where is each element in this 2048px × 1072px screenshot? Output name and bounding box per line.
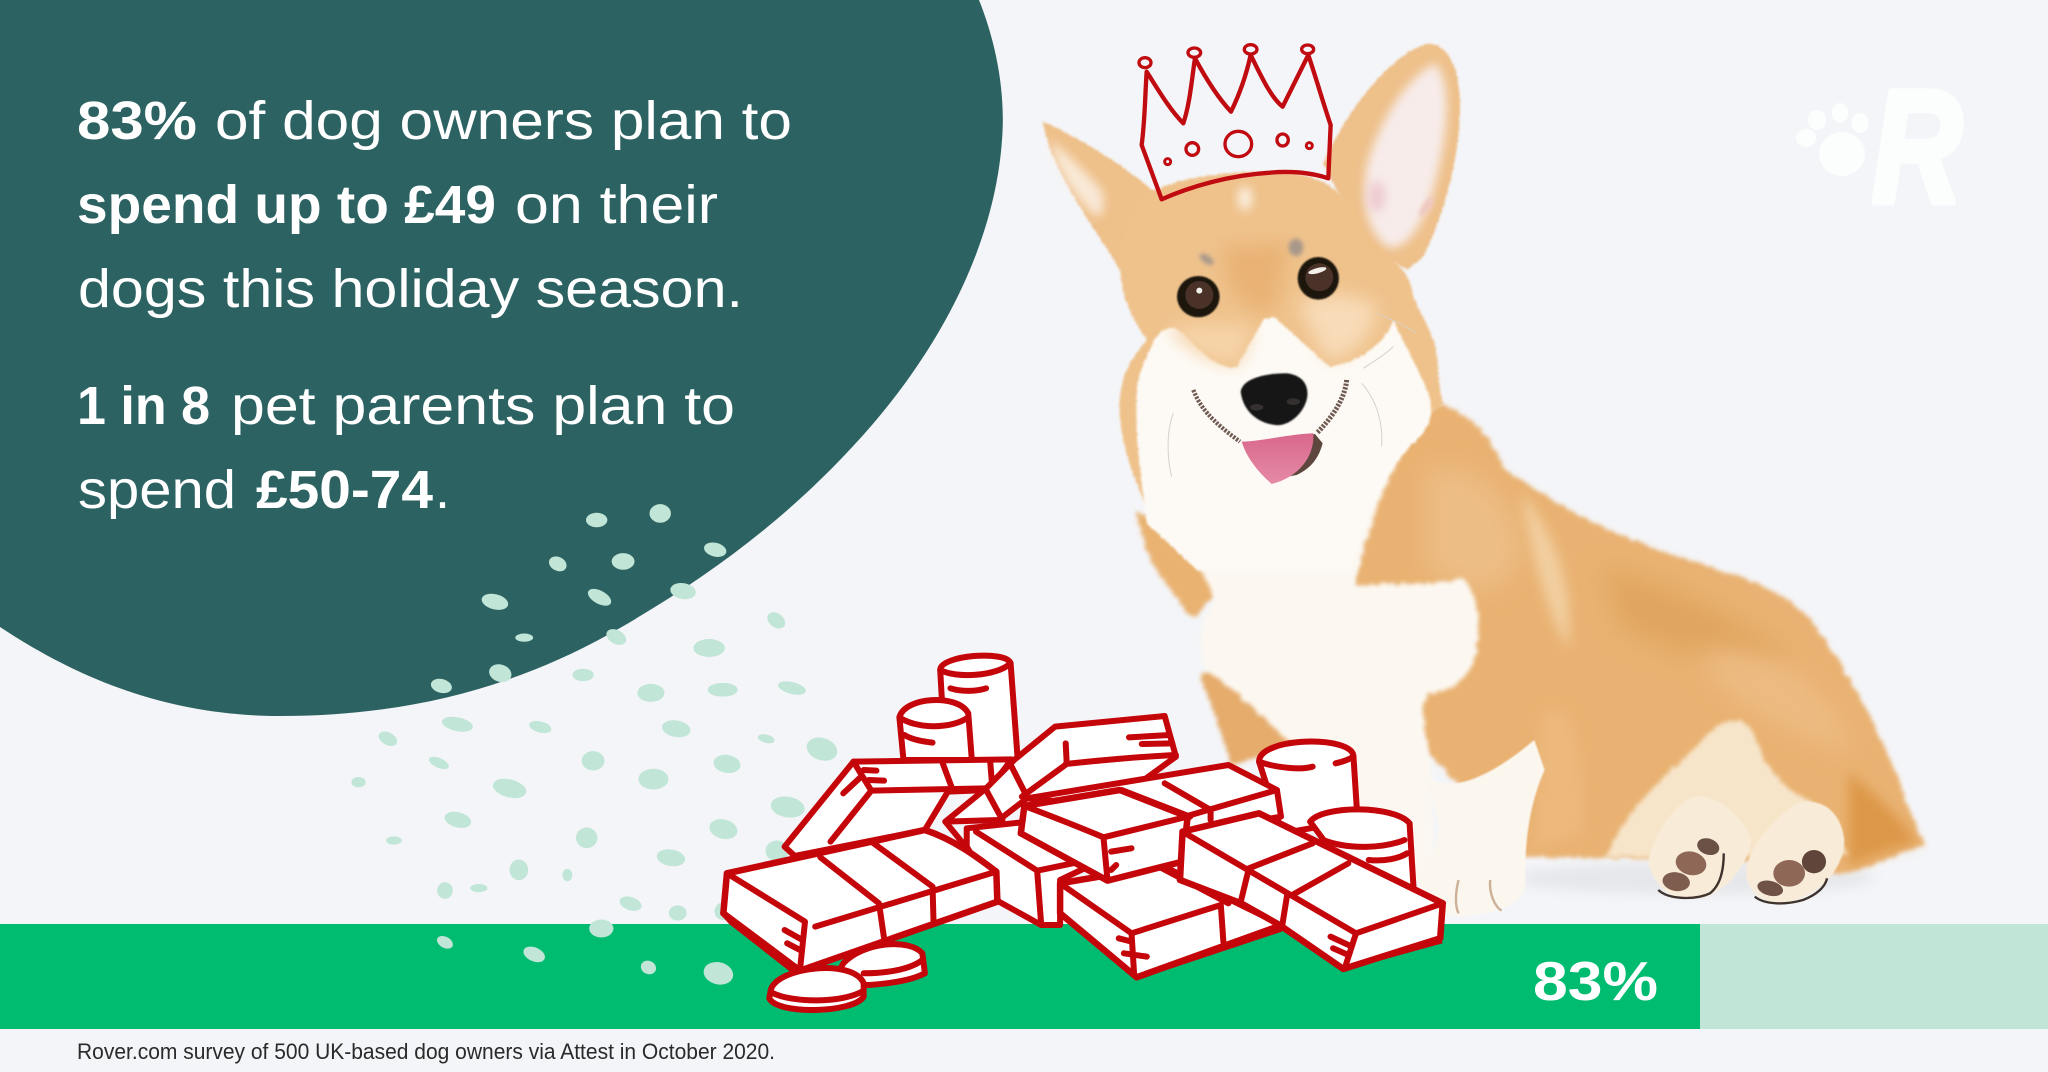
left hind paw (1648, 796, 1751, 899)
gift: low middle box (967, 823, 1088, 925)
right ear (1323, 43, 1460, 270)
dog hind paws and front leg (1417, 740, 1844, 917)
source footnote: Rover.com survey of 500 UK-based dog owners via Attest in October 2020. (77, 1039, 775, 1064)
icon: hand-drawn crown (1139, 45, 1331, 199)
right hind paw (1746, 802, 1844, 903)
stat: 1 in 8 pet parents (77, 376, 735, 520)
stat: 83% of dog owners: of dog owners plan to (215, 91, 792, 151)
whiskers (1168, 313, 1417, 477)
front leg (1417, 740, 1545, 917)
white chest (1144, 444, 1478, 882)
tongue (1242, 433, 1313, 484)
right eye (1298, 257, 1339, 300)
gift: centre box (1021, 790, 1188, 881)
nose (1241, 373, 1307, 425)
gift: large left box (723, 830, 997, 972)
stat: 83% of dog owners: spend up to £49 (77, 175, 496, 235)
panel: dark teal blob (0, 0, 1003, 716)
gift shadow edges (1137, 925, 1443, 978)
icon: paw print (1796, 103, 1869, 176)
gift: lying box left (785, 759, 1012, 856)
left eye (1177, 276, 1220, 317)
gift: slanted box (945, 716, 1176, 847)
left ear (1043, 122, 1157, 270)
floor shadow (1515, 862, 1876, 895)
far front leg (1201, 666, 1301, 766)
logo letter R: R (1872, 57, 1962, 236)
progress bar track (1700, 924, 2048, 1029)
dog body layers (1137, 403, 1926, 895)
stat: 1 in 8 pet parents: £50-74 (256, 460, 433, 520)
stat: 83% of dog owners (77, 91, 792, 319)
left shoulder fur (1137, 513, 1217, 619)
illustration: corgi photo (1043, 43, 1926, 917)
gift: right tall cylinder (1259, 742, 1358, 833)
stat: 83% of dog owners: dogs this holiday season. (78, 259, 743, 319)
dark fur around eyes (1223, 240, 1287, 314)
progress bar fill: 83% (0, 924, 1700, 1029)
headline text block (77, 91, 792, 520)
head base fur (1119, 172, 1443, 503)
body silhouette (1354, 403, 1926, 874)
stat: 1 in 8 pet parents: spend (78, 460, 236, 520)
eyebrows (1198, 239, 1303, 267)
gift: short cylinder (899, 700, 972, 760)
scattered confetti dots (351, 504, 841, 988)
forehead highlight (1238, 186, 1252, 210)
mouth (1193, 380, 1347, 442)
stat: 83% of dog owners: 83% (77, 91, 197, 151)
illustration: pile of gift boxes (723, 656, 1443, 1010)
gift: coins (769, 944, 925, 1010)
stat: 83% of dog owners: on their (515, 175, 718, 235)
white face and ruff (1136, 317, 1431, 570)
gift: right short cylinder (1310, 809, 1414, 890)
cheek washes (1167, 295, 1377, 364)
dog head (1043, 43, 1460, 570)
gift: right long box (1180, 813, 1443, 969)
stat: 1 in 8 pet parents: pet parents plan to (231, 376, 735, 436)
stat: 1 in 8 pet parents: . (435, 460, 450, 520)
gift: tall cylinder (940, 656, 1018, 760)
bar label: 83%: 83% (1533, 950, 1658, 1012)
gift: back flat box (1027, 765, 1281, 833)
gift: lower centre box (1060, 866, 1282, 977)
logo: paw and R (1796, 57, 1962, 236)
body light and dark fur (1428, 469, 1917, 867)
belly and hind leg cream fur (1605, 720, 1849, 858)
stat: 1 in 8 pet parents: 1 in 8 (77, 376, 210, 436)
lower jaw (1243, 434, 1323, 480)
